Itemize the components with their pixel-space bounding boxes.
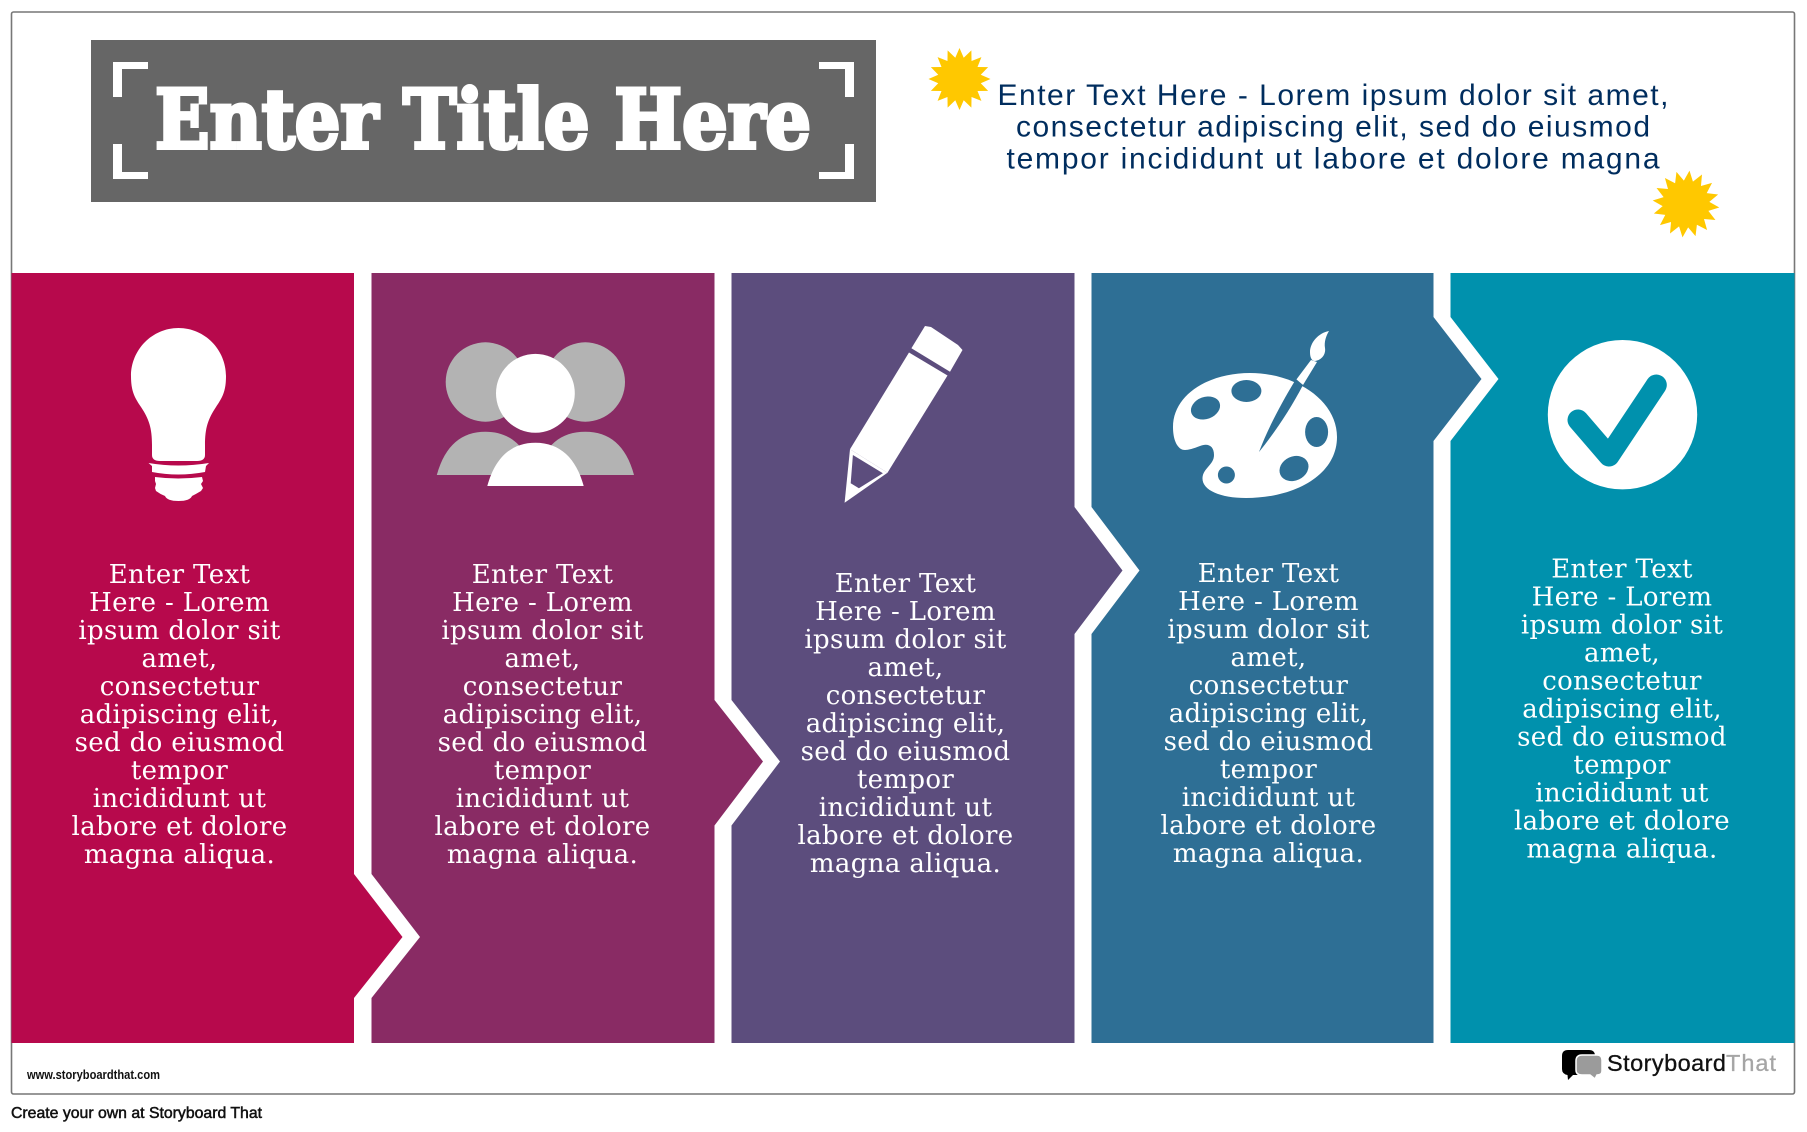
- panel 3 text: ipsum dolor sit: [804, 625, 1007, 655]
- panel 4 text: Enter Text: [1198, 559, 1339, 589]
- icon: light bulb: [131, 328, 226, 501]
- panel 1 text: Enter Text: [109, 560, 250, 590]
- storyboard that logo: [1562, 1050, 1776, 1080]
- panel 1: idea: [12, 273, 402, 1043]
- panel 3 text: consectetur: [826, 681, 985, 711]
- panel 5 text: sed do eiusmod: [1517, 722, 1727, 752]
- panel 1 text: tempor: [131, 756, 228, 786]
- panel 3 text: Enter Text: [835, 569, 976, 599]
- panel 3 background with arrow: [732, 273, 1122, 1043]
- logo icon: speech bubbles: [1562, 1050, 1602, 1080]
- panel 1 text: amet,: [141, 644, 218, 674]
- website footer text: www.storyboardthat.com: [26, 1067, 160, 1082]
- panel 2 text: Here - Lorem: [452, 588, 633, 618]
- panel 3 text: tempor: [857, 765, 954, 795]
- icon: group of people: [437, 342, 634, 486]
- panel 3 text: amet,: [867, 653, 944, 683]
- panel 1 text: adipiscing elit,: [80, 700, 279, 730]
- panel 4 text: consectetur: [1189, 671, 1348, 701]
- panel 2: team: [372, 273, 763, 1043]
- panel 2 text: ipsum dolor sit: [441, 616, 644, 646]
- panel 4 text: labore et dolore: [1161, 811, 1376, 841]
- panel 4 text: adipiscing elit,: [1169, 699, 1368, 729]
- icon: pencil: [845, 326, 962, 503]
- intro text: consectetur adipiscing elit, sed do eiusmod: [1016, 111, 1650, 144]
- panel 3 text: adipiscing elit,: [806, 709, 1005, 739]
- panel 3 text: sed do eiusmod: [801, 737, 1010, 767]
- panel 5 text: tempor: [1573, 750, 1671, 780]
- panel 2 text: labore et dolore: [435, 812, 650, 842]
- panel 1 text: labore et dolore: [72, 812, 287, 842]
- panel 4 text: magna aliqua.: [1173, 839, 1364, 869]
- panel 4 text: ipsum dolor sit: [1167, 615, 1370, 645]
- panel 3 text: labore et dolore: [798, 821, 1013, 851]
- panel 1 text: consectetur: [100, 672, 259, 702]
- panel 2 text: consectetur: [463, 672, 622, 702]
- panel 5: done: [1450, 273, 1794, 1043]
- panel 4: create: [1092, 273, 1482, 1043]
- panel 2 text: Enter Text: [472, 560, 613, 590]
- title text: Enter Title Here: [155, 73, 811, 168]
- panel 5 text: magna aliqua.: [1526, 834, 1718, 864]
- panel 1 text: incididunt ut: [93, 784, 266, 814]
- intro text: tempor incididunt ut labore et dolore magna: [1006, 142, 1660, 175]
- title banner: [91, 40, 876, 202]
- intro text: Enter Text Here - Lorem ipsum dolor sit amet,: [998, 79, 1668, 112]
- panel 5 text: amet,: [1584, 638, 1660, 668]
- panel 3 text: magna aliqua.: [810, 849, 1001, 879]
- panel 2 text: incididunt ut: [456, 784, 629, 814]
- logo wordmark: Storyboard: [1607, 1050, 1726, 1076]
- panel 4 background with arrow: [1092, 273, 1482, 1043]
- panel 5 text: Here - Lorem: [1532, 582, 1712, 612]
- panel 1 text: magna aliqua.: [84, 840, 275, 870]
- panel 2 text: amet,: [504, 644, 581, 674]
- panel 4 text: tempor: [1220, 755, 1317, 785]
- panel 4 text: sed do eiusmod: [1164, 727, 1373, 757]
- panel 3 text: Here - Lorem: [815, 597, 996, 627]
- starburst top left: [928, 48, 990, 110]
- logo wordmark: That: [1726, 1050, 1776, 1076]
- panel 2 text: magna aliqua.: [447, 840, 638, 870]
- icon: paint palette: [1173, 331, 1337, 498]
- panel 5 text: consectetur: [1542, 666, 1702, 696]
- panel 4 text: incididunt ut: [1182, 783, 1355, 813]
- panel 2 text: sed do eiusmod: [438, 728, 647, 758]
- panel 1 text: Here - Lorem: [89, 588, 270, 618]
- panel 1 text: sed do eiusmod: [75, 728, 284, 758]
- panel 2 text: adipiscing elit,: [443, 700, 642, 730]
- panel 5 text: adipiscing elit,: [1522, 694, 1722, 724]
- panel 2 text: tempor: [494, 756, 591, 786]
- panel 3: write: [732, 273, 1122, 1043]
- panel 5 background: [1450, 273, 1794, 1043]
- panel 5 text: ipsum dolor sit: [1521, 610, 1723, 640]
- credit line: Create your own at Storyboard That: [11, 1105, 263, 1122]
- panel 4 text: amet,: [1230, 643, 1307, 673]
- icon: check mark: [1548, 340, 1697, 489]
- panel 5 text: incididunt ut: [1535, 778, 1709, 808]
- panel 3 text: incididunt ut: [819, 793, 992, 823]
- panel 4 text: Here - Lorem: [1178, 587, 1359, 617]
- starburst bottom right: [1649, 167, 1723, 241]
- panel 1 text: ipsum dolor sit: [78, 616, 281, 646]
- panel 5 text: Enter Text: [1551, 554, 1693, 584]
- title corner brackets: [113, 62, 854, 179]
- panel 5 text: labore et dolore: [1514, 806, 1730, 836]
- panel 1 background with arrow: [12, 273, 402, 1043]
- panel 2 background with arrow: [372, 273, 763, 1043]
